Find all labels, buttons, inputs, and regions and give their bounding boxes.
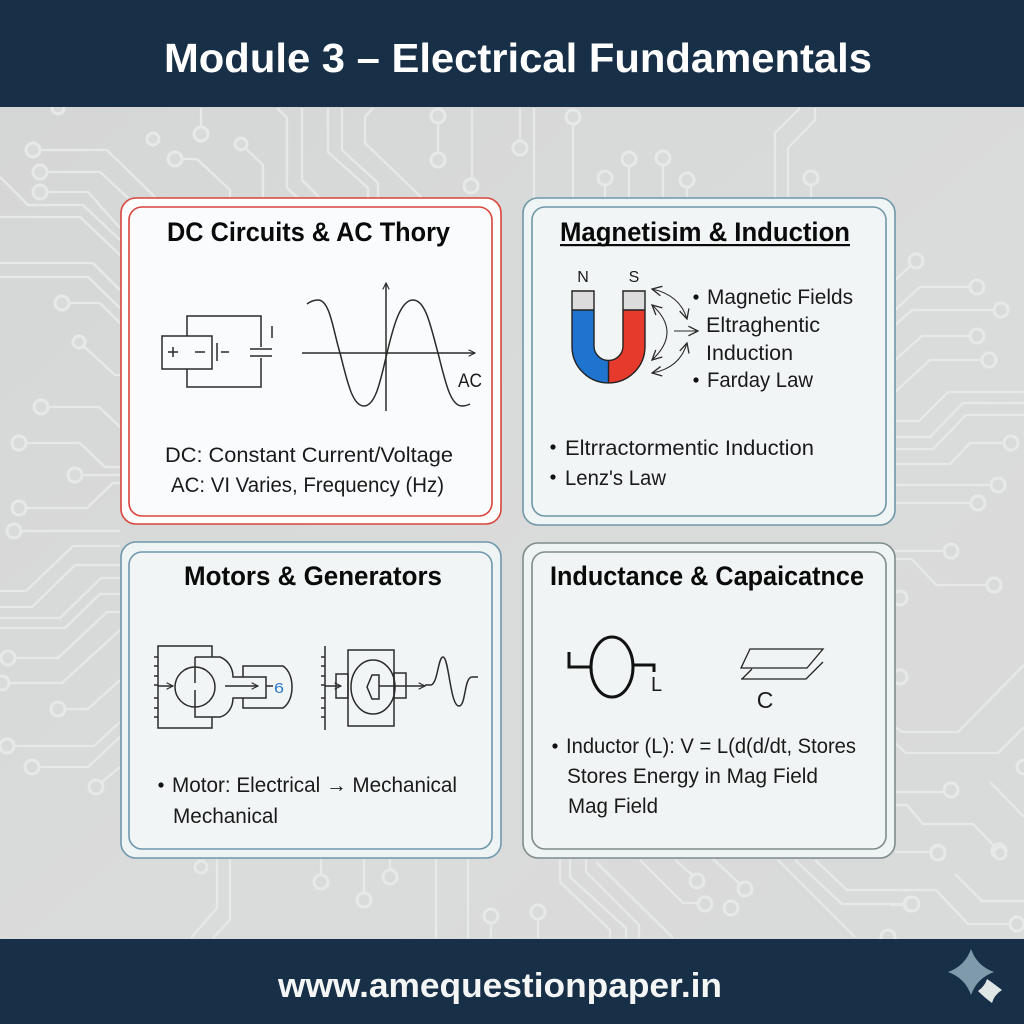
icon: sparkle: [948, 949, 1002, 1003]
footer url: www.amequestionpaper.in: [277, 967, 722, 1005]
arrows: magnetic field lines: [652, 289, 698, 373]
diagram: generator: [321, 646, 478, 730]
list: motor description: Mechanical: [173, 805, 278, 828]
heading: magnetism: Magnetisim & Induction: [560, 217, 850, 247]
list: inductor description: Inductor (L): V = L(d(d/dt, Stores: [566, 735, 856, 758]
list: magnetic topics: Induction: [706, 342, 793, 365]
icon: capacitor plates: [741, 649, 823, 713]
icon: horseshoe magnet: [572, 269, 645, 383]
icon: capacitor plates: C: [757, 687, 773, 713]
diagram: motor: [154, 646, 292, 728]
heading: inductance: Inductance & Capaicatnce: [550, 561, 864, 591]
list: magnetic topics: Farday Law: [707, 369, 814, 392]
diagram: DC circuit: [162, 316, 272, 387]
diagram: motor: 6: [274, 680, 284, 697]
list: motor description: [158, 774, 457, 828]
heading: DC circuits: DC Circuits & AC Thory: [167, 217, 450, 247]
list: induction laws: [550, 437, 814, 490]
footer band: [0, 939, 1024, 1024]
heading: motors: Motors & Generators: [184, 561, 442, 591]
list: inductor description: [552, 735, 856, 818]
icon: horseshoe magnet: N: [577, 269, 589, 286]
list: induction laws: Eltrractormentic Induction: [565, 437, 814, 460]
chart: AC sine wave: [302, 283, 482, 411]
chart: AC sine wave: AC: [458, 371, 482, 392]
panel: motors and generators: [121, 542, 501, 858]
icon: inductor: L: [651, 674, 662, 696]
list: inductor description: Stores Energy in Mag Field: [567, 765, 818, 788]
icon: horseshoe magnet: S: [629, 269, 639, 286]
list: magnetic topics: [693, 286, 853, 392]
list: magnetic topics: Eltraghentic: [706, 314, 820, 337]
title: Module 3 – Electrical Fundamentals: [164, 35, 872, 81]
text: AC description: AC: VI Varies, Frequency (Hz): [171, 474, 444, 497]
list: motor description: Motor: Electrical → Mechanical: [172, 774, 457, 797]
text: DC description: DC: Constant Current/Voltage: [165, 444, 453, 467]
panel: DC circuits and AC theory: [121, 198, 501, 524]
panel: inductance and capacitance: [523, 543, 895, 858]
header band: [0, 0, 1024, 107]
panel: magnetism and induction: [523, 198, 895, 525]
list: induction laws: Lenz's Law: [565, 467, 667, 490]
icon: inductor: [569, 637, 662, 697]
list: magnetic topics: Magnetic Fields: [707, 286, 853, 309]
list: inductor description: Mag Field: [568, 795, 658, 818]
